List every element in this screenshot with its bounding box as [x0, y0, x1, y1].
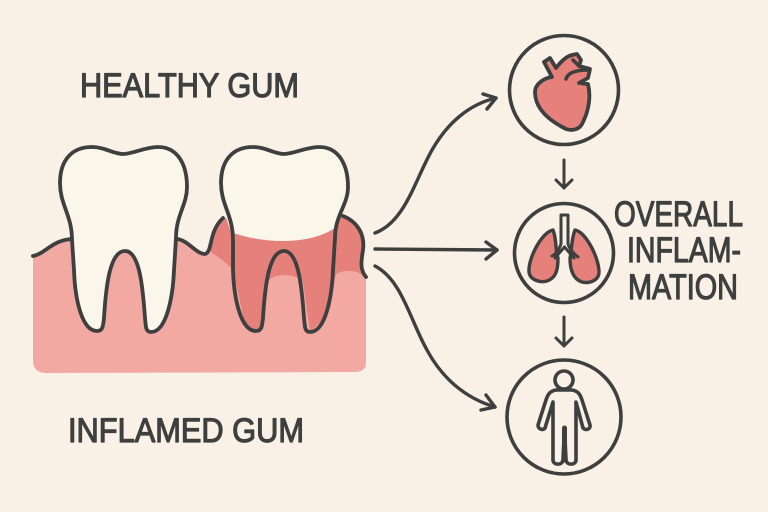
- icon: lungs in circle: [514, 204, 614, 302]
- icon: heart in circle: [510, 36, 618, 144]
- arrow: to heart: [375, 94, 496, 233]
- heading: healthy gum: HEALTHY GUM: [80, 67, 299, 105]
- inflamed tooth crown: [221, 147, 348, 241]
- healthy tooth: [60, 147, 187, 332]
- gum and teeth illustration: [33, 147, 366, 373]
- inflamed tooth outline: [221, 147, 348, 332]
- arrow: to body: [375, 266, 495, 410]
- label: overall inflammation: INFLAM-: [627, 231, 741, 270]
- gum tissue: [33, 216, 366, 373]
- label: overall inflammation: [614, 195, 743, 307]
- icon: person in circle: [507, 360, 621, 474]
- label: overall inflammation: MATION: [628, 268, 738, 307]
- gum outline: [33, 216, 366, 277]
- arrow: lungs to body: [556, 317, 572, 346]
- heading: inflamed gum: INFLAMED GUM: [68, 412, 304, 450]
- arrow: to lungs: [375, 242, 497, 259]
- inflamed gum area: [211, 216, 366, 332]
- arrow: heart to lungs: [556, 160, 572, 188]
